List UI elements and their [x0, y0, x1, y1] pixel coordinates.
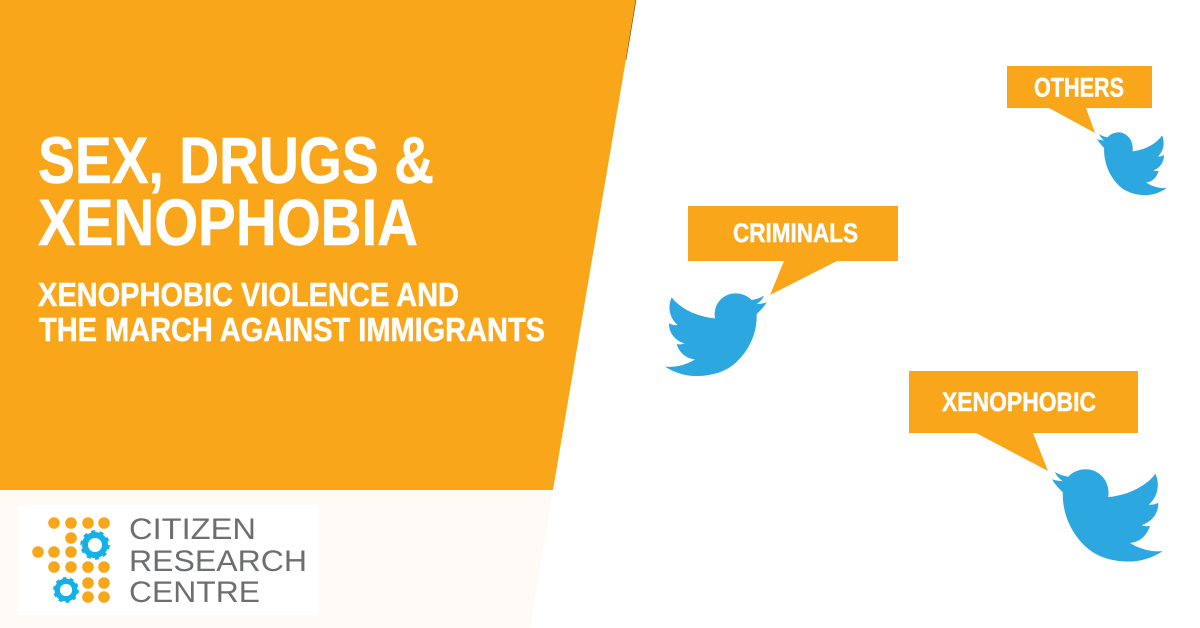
- panel: cream logo band: [0, 490, 553, 628]
- callout: criminals: CRIMINALS: [733, 218, 858, 248]
- callout: xenophobic: XENOPHOBIC: [942, 387, 1096, 417]
- callout: xenophobic: [909, 371, 1138, 471]
- title: SEX, DRUGS &: [38, 123, 434, 197]
- callout: others: OTHERS: [1034, 72, 1124, 102]
- logo wordmark: RESEARCH: [129, 545, 307, 578]
- callout: others: [1007, 66, 1152, 133]
- icon: twitter bird xenophobic: [1052, 469, 1163, 562]
- logo wordmark: CITIZEN: [129, 513, 256, 546]
- logo icon: dots and gears: [32, 517, 110, 603]
- subtitle: XENOPHOBIC VIOLENCE AND: [38, 277, 459, 314]
- icon: twitter bird others: [1097, 132, 1167, 195]
- logo wordmark: CENTRE: [129, 576, 260, 609]
- title: [38, 123, 434, 259]
- subtitle: THE MARCH AGAINST IMMIGRANTS: [39, 312, 545, 349]
- logo: Citizen Research Centre: [18, 505, 319, 615]
- title: XENOPHOBIA: [38, 185, 418, 259]
- panel: orange title panel: [0, 0, 636, 490]
- subtitle: [38, 277, 545, 349]
- callout: criminals: [688, 206, 898, 295]
- icon: twitter bird criminals: [665, 293, 767, 376]
- logo wordmark: [129, 513, 307, 609]
